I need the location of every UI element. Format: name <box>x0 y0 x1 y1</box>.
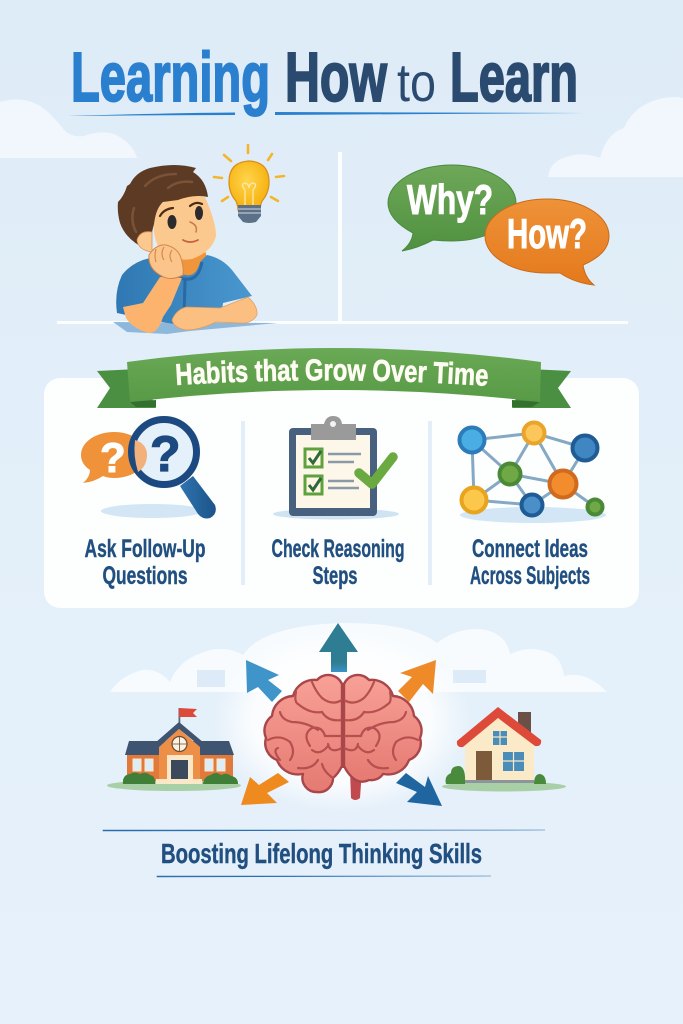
raised arm <box>123 277 182 333</box>
brain glow <box>212 628 472 812</box>
clipboard clip <box>311 416 356 440</box>
school steps <box>156 779 202 784</box>
label: ask follow-up questions: Ask Follow-Up <box>84 535 206 563</box>
dark question mark: ? <box>150 426 181 482</box>
section dividers <box>57 152 628 324</box>
label: connect ideas across subjects <box>470 535 590 590</box>
label: How?: How? <box>507 210 587 257</box>
eyes <box>168 206 203 229</box>
cloud: top left <box>0 100 137 158</box>
arrow: upper right <box>398 660 436 702</box>
door <box>476 751 492 781</box>
bubble seen through lens <box>134 440 147 472</box>
wing roofs <box>125 741 234 755</box>
eyebrows, nose and smile <box>160 203 202 242</box>
label: Why?: Why? <box>407 176 493 223</box>
label: connect ideas across subjects: Connect Ideas <box>472 535 588 563</box>
label: connect ideas across subjects: Across Subjects <box>470 562 590 590</box>
window: lower <box>503 752 524 771</box>
base <box>238 205 261 223</box>
item: ask follow-up questions <box>81 420 216 590</box>
house walls <box>465 716 534 782</box>
school <box>107 708 241 791</box>
small pane: left <box>197 670 225 687</box>
clip hole <box>330 421 336 427</box>
title word: Learn: Learn <box>450 38 578 116</box>
icon: brain <box>264 675 422 800</box>
flag <box>178 708 197 725</box>
label: check reasoning steps <box>272 535 404 590</box>
foundation <box>465 780 534 783</box>
icon: question bubble and magnifier <box>81 420 216 518</box>
hair <box>118 165 208 249</box>
ribbon folds <box>130 400 540 407</box>
roof <box>457 707 541 747</box>
title <box>68 38 585 116</box>
t-shirt <box>116 255 252 325</box>
caption rule: bottom <box>157 876 491 877</box>
center block <box>159 729 200 781</box>
arrow: upper left <box>246 660 282 702</box>
bulb rays <box>214 145 284 201</box>
resting arm <box>172 297 257 330</box>
panel: habits <box>44 378 639 608</box>
filament <box>242 183 256 208</box>
magnifier shadow <box>101 504 203 518</box>
label: check reasoning steps: Steps <box>312 562 358 590</box>
text lines <box>328 454 361 488</box>
ribbon banner <box>97 348 571 408</box>
glass <box>229 161 269 210</box>
checkbox ticks <box>309 451 321 490</box>
icon: clipboard <box>273 416 399 520</box>
item: connect ideas across subjects <box>460 422 606 590</box>
white question mark: ? <box>100 434 126 481</box>
panel dividers <box>241 421 432 585</box>
title word: to: to <box>397 53 436 113</box>
ribbon title: Habits that Grow Over Time <box>176 358 488 386</box>
school lawn <box>107 780 241 791</box>
door <box>167 755 193 781</box>
cloud: top right <box>548 97 683 177</box>
title word: Learning: Learning <box>71 38 270 116</box>
window: upper <box>493 731 507 745</box>
house <box>442 707 566 792</box>
arrow: lower right <box>396 773 442 806</box>
chimney <box>518 712 531 736</box>
school bushes <box>123 772 238 784</box>
big check mark <box>359 457 393 484</box>
label: ask follow-up questions <box>84 535 206 590</box>
center gable roof <box>155 722 204 746</box>
hand on cheek <box>149 245 183 278</box>
network shadow <box>460 507 606 523</box>
neck <box>172 250 210 279</box>
ear <box>137 232 152 252</box>
icon: light bulb <box>214 145 284 223</box>
network links <box>472 433 595 507</box>
shirt collar and shade <box>180 262 202 318</box>
title word: How: How <box>285 38 387 116</box>
clipboard board <box>289 428 377 516</box>
base ridges <box>238 209 261 213</box>
table shadow <box>113 322 278 334</box>
clipboard paper <box>296 435 370 508</box>
orange bubble <box>81 432 147 483</box>
school windows <box>133 759 225 771</box>
window muntins <box>493 731 524 771</box>
clipboard shadow <box>273 508 399 520</box>
right hemisphere <box>344 675 422 782</box>
brain stem <box>350 770 362 800</box>
face <box>153 196 216 260</box>
caption text: Boosting Lifelong Thinking Skills <box>161 838 482 869</box>
arrow: up <box>319 623 358 672</box>
illustration: thinking boy <box>113 165 278 334</box>
label: check reasoning steps: Check Reasoning <box>272 535 404 563</box>
hair highlights <box>132 174 192 232</box>
item: check reasoning steps <box>272 416 404 590</box>
fingers <box>155 247 172 262</box>
ribbon band <box>127 348 541 402</box>
icon: network <box>460 422 606 523</box>
ribbon tail: left <box>97 369 156 408</box>
label: ask follow-up questions: Questions <box>102 562 188 590</box>
round window <box>172 736 187 752</box>
school wings <box>127 754 233 781</box>
house bushes <box>446 766 546 784</box>
center fissure <box>342 684 344 768</box>
network nodes <box>460 422 602 516</box>
round window bars <box>172 737 187 751</box>
arrow: lower left <box>241 773 289 805</box>
magnifier handle <box>180 476 216 518</box>
cloud backdrop <box>110 623 607 692</box>
small pane: right <box>453 670 486 683</box>
speech bubble: Why? <box>388 165 516 251</box>
house lawn <box>442 782 566 792</box>
magnifier lens <box>132 420 196 484</box>
title underline <box>68 112 585 116</box>
speech bubble: How? <box>485 199 609 285</box>
left hemisphere <box>264 675 342 792</box>
ribbon tail: right <box>512 369 571 408</box>
checkboxes <box>305 449 322 494</box>
caption rule: top <box>103 830 545 831</box>
